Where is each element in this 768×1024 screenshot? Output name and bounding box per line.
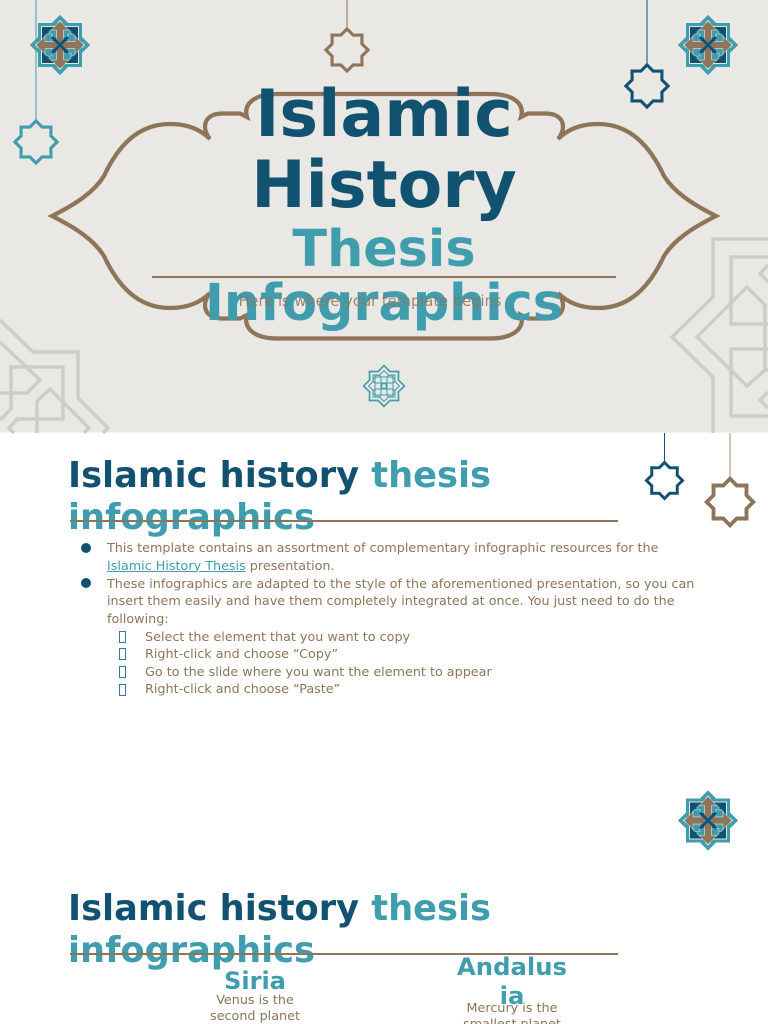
heading: slide three: infographics (68, 930, 315, 971)
hanging star: teal left (15, 0, 57, 163)
bullet text one (106, 541, 658, 574)
geometric pattern: right (672, 239, 768, 433)
bullet text one: This template contains an assortment of complementary infographic resources for the (107, 541, 658, 556)
step marker three (119, 666, 126, 678)
heading: slide two (68, 455, 491, 538)
icon: ornament slide two (678, 790, 738, 851)
bullet list: intro (81, 541, 694, 696)
bullet text two: These infographics are adapted to the style of the aforementioned presentation, so you can (107, 576, 694, 592)
step text four: Right-click and choose “Paste” (145, 682, 340, 696)
bullet text two: insert them easily and have them completely integrated at once. You just need to do the (107, 594, 675, 609)
icon: small line ornament bottom centre (364, 366, 404, 406)
bullet text two (106, 576, 694, 626)
description: Siria (210, 993, 300, 1024)
step text two: Right-click and choose “Copy” (145, 646, 338, 662)
bullet dot two (81, 578, 91, 588)
step text one: Select the element that you want to copy (145, 630, 410, 644)
ornate title frame (52, 94, 716, 338)
subtitle: Thesis Infographics: Thesis (292, 219, 476, 278)
description: Siria: Venus is the (216, 993, 294, 1008)
title: Islamic History (251, 77, 517, 223)
divider rule: slide two (70, 520, 618, 522)
title: Islamic History: Islamic (255, 77, 513, 152)
divider rule: slide three (70, 953, 618, 955)
description: Andalusia: Mercury is the (467, 1001, 557, 1016)
hanging star: navy slide two (646, 433, 683, 499)
label: Andalusia: Andalus (457, 952, 567, 981)
step marker four (119, 684, 126, 696)
tagline: Here is where your template begins (238, 293, 502, 310)
subtitle: Thesis Infographics: Infographics (205, 273, 563, 332)
title: Islamic History: History (251, 148, 517, 223)
label: Andalusia: ia (500, 981, 524, 1010)
icon: ornament top right (678, 15, 738, 75)
heading: slide two: Islamic history thesis (68, 455, 491, 496)
step marker one (119, 630, 126, 642)
bullet text one: Islamic History Thesis presentation. (107, 558, 335, 574)
heading: slide two: infographics (68, 497, 315, 538)
bullet dot one (81, 543, 91, 553)
label: Siria: Siria (224, 967, 286, 995)
hanging star: brown slide two (707, 433, 753, 525)
bullet text two: following: (107, 612, 169, 626)
description: Siria: second planet (210, 1008, 300, 1024)
panel: title slide background (0, 0, 768, 432)
heading: slide three (68, 888, 491, 971)
geometric pattern: left (0, 320, 108, 433)
heading: slide three: Islamic history thesis (68, 888, 491, 929)
step text three: Go to the slide where you want the element to appear (145, 664, 492, 680)
subtitle: Thesis Infographics (205, 219, 563, 332)
label: Andalusia (457, 952, 567, 1010)
hanging star: brown top (326, 0, 368, 71)
icon: ornament top left (30, 15, 90, 75)
step marker two (119, 648, 126, 660)
description: Andalusia (463, 1001, 561, 1024)
divider rule: title slide (152, 276, 616, 278)
hanging star: navy right (626, 0, 668, 107)
